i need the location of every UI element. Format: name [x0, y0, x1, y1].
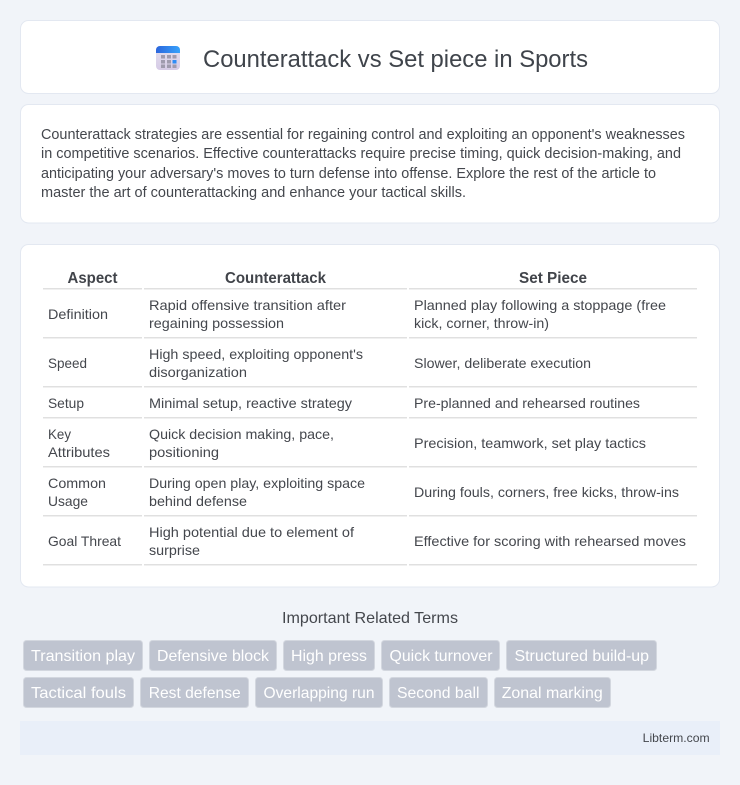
table row: Speed — [43, 346, 697, 388]
table row: Definition: kick, corner, throw-in) — [414, 315, 549, 331]
table row: Goal Threat: surprise — [149, 542, 200, 558]
tag: Second ball — [390, 678, 488, 708]
table row: Setup — [43, 395, 697, 418]
tag: Rest defense: Rest defense — [149, 685, 241, 702]
text block: introduction paragraph — [41, 127, 685, 201]
tag cloud: related terms — [24, 640, 656, 708]
heading: related terms: Important Related Terms — [282, 610, 458, 627]
table row: Goal Threat: High potential due to element of — [149, 524, 354, 540]
table row: Definition: Rapid offensive transition after — [149, 297, 346, 313]
table row: Definition: Definition — [48, 306, 108, 322]
table row: Goal Threat: Effective for scoring with rehearsed moves — [414, 533, 686, 549]
tag: Defensive block — [150, 640, 276, 670]
tag: Tactical fouls: Tactical fouls — [31, 685, 126, 702]
tag: Overlapping run — [256, 678, 382, 708]
table row: Common Usage: behind defense — [149, 493, 247, 509]
table row: Key Attributes — [43, 426, 697, 468]
table row: Definition: regaining possession — [149, 315, 284, 331]
table row: Setup: Pre-planned and rehearsed routines — [414, 395, 640, 411]
table row: Common Usage — [43, 475, 697, 516]
table header row: Aspect — [68, 270, 118, 287]
table row: Speed: disorganization — [149, 364, 247, 380]
tag: Quick turnover: Quick turnover — [390, 648, 493, 665]
table row: Goal Threat: Goal Threat — [48, 533, 121, 549]
tag: Transition play: Transition play — [31, 648, 135, 665]
tag: Defensive block: Defensive block — [157, 648, 270, 665]
table row: Goal Threat — [43, 524, 697, 566]
tag: High press — [284, 640, 374, 670]
text block: introduction paragraph: Counterattack strategies are essential for regaining control and exploiting an opponent's weaknesses — [41, 127, 685, 143]
tag: Overlapping run: Overlapping run — [264, 685, 374, 702]
table header row: Set Piece — [519, 270, 587, 287]
tag: High press: High press — [291, 648, 367, 665]
table row: Key Attributes: positioning — [149, 444, 219, 460]
table row: Common Usage: During fouls, corners, free kicks, throw-ins — [414, 484, 679, 500]
tag: Structured build-up: Structured build-up — [514, 648, 649, 665]
panel: introduction — [20, 104, 720, 223]
text block: introduction paragraph: anticipating your adversary's moves to turn defense into offense. Explore the rest of the article to — [41, 166, 656, 182]
table header row: Counterattack — [225, 270, 326, 287]
tag: Second ball: Second ball — [397, 685, 480, 702]
tag: Tactical fouls — [24, 678, 134, 708]
table row: Key Attributes: Precision, teamwork, set play tactics — [414, 435, 646, 451]
tag: Transition play — [24, 640, 142, 670]
table header row — [43, 270, 697, 290]
text block: introduction paragraph: master the art of counterattacking and enhance your tactical skills. — [41, 185, 466, 201]
footer — [20, 721, 720, 755]
icon: calendar — [156, 46, 180, 70]
tag: Structured build-up — [506, 640, 656, 670]
panel: header — [20, 20, 720, 94]
table row: Key Attributes: Attributes — [48, 444, 110, 460]
title: Counterattack vs Set piece in Sports — [203, 46, 588, 73]
table row: Speed: High speed, exploiting opponent's — [149, 346, 363, 362]
tag: Zonal marking: Zonal marking — [502, 685, 603, 702]
table row: Key Attributes: Quick decision making, pace, — [149, 426, 334, 442]
table row: Key Attributes: Key — [48, 426, 71, 442]
table row: Setup: Setup — [48, 395, 84, 411]
table row: Common Usage: During open play, exploiting space — [149, 475, 365, 491]
text block: introduction paragraph: in competitive scenarios. Effective counterattacks require precise timing, quick decision-making, and — [41, 146, 681, 162]
panel: comparison table — [20, 244, 720, 587]
table row: Setup: Minimal setup, reactive strategy — [149, 395, 352, 411]
table row: Definition: Planned play following a stoppage (free — [414, 297, 666, 313]
table row: Definition — [43, 297, 697, 338]
tag: Zonal marking — [494, 678, 610, 708]
tag: Rest defense — [140, 678, 248, 708]
tag: Quick turnover — [382, 640, 500, 670]
table row: Speed: Slower, deliberate execution — [414, 355, 591, 371]
table row: Speed: Speed — [48, 355, 87, 371]
table row: Common Usage: Common — [48, 475, 106, 491]
table row: Common Usage: Usage — [48, 493, 88, 509]
footer credit: Libterm.com — [643, 731, 710, 745]
